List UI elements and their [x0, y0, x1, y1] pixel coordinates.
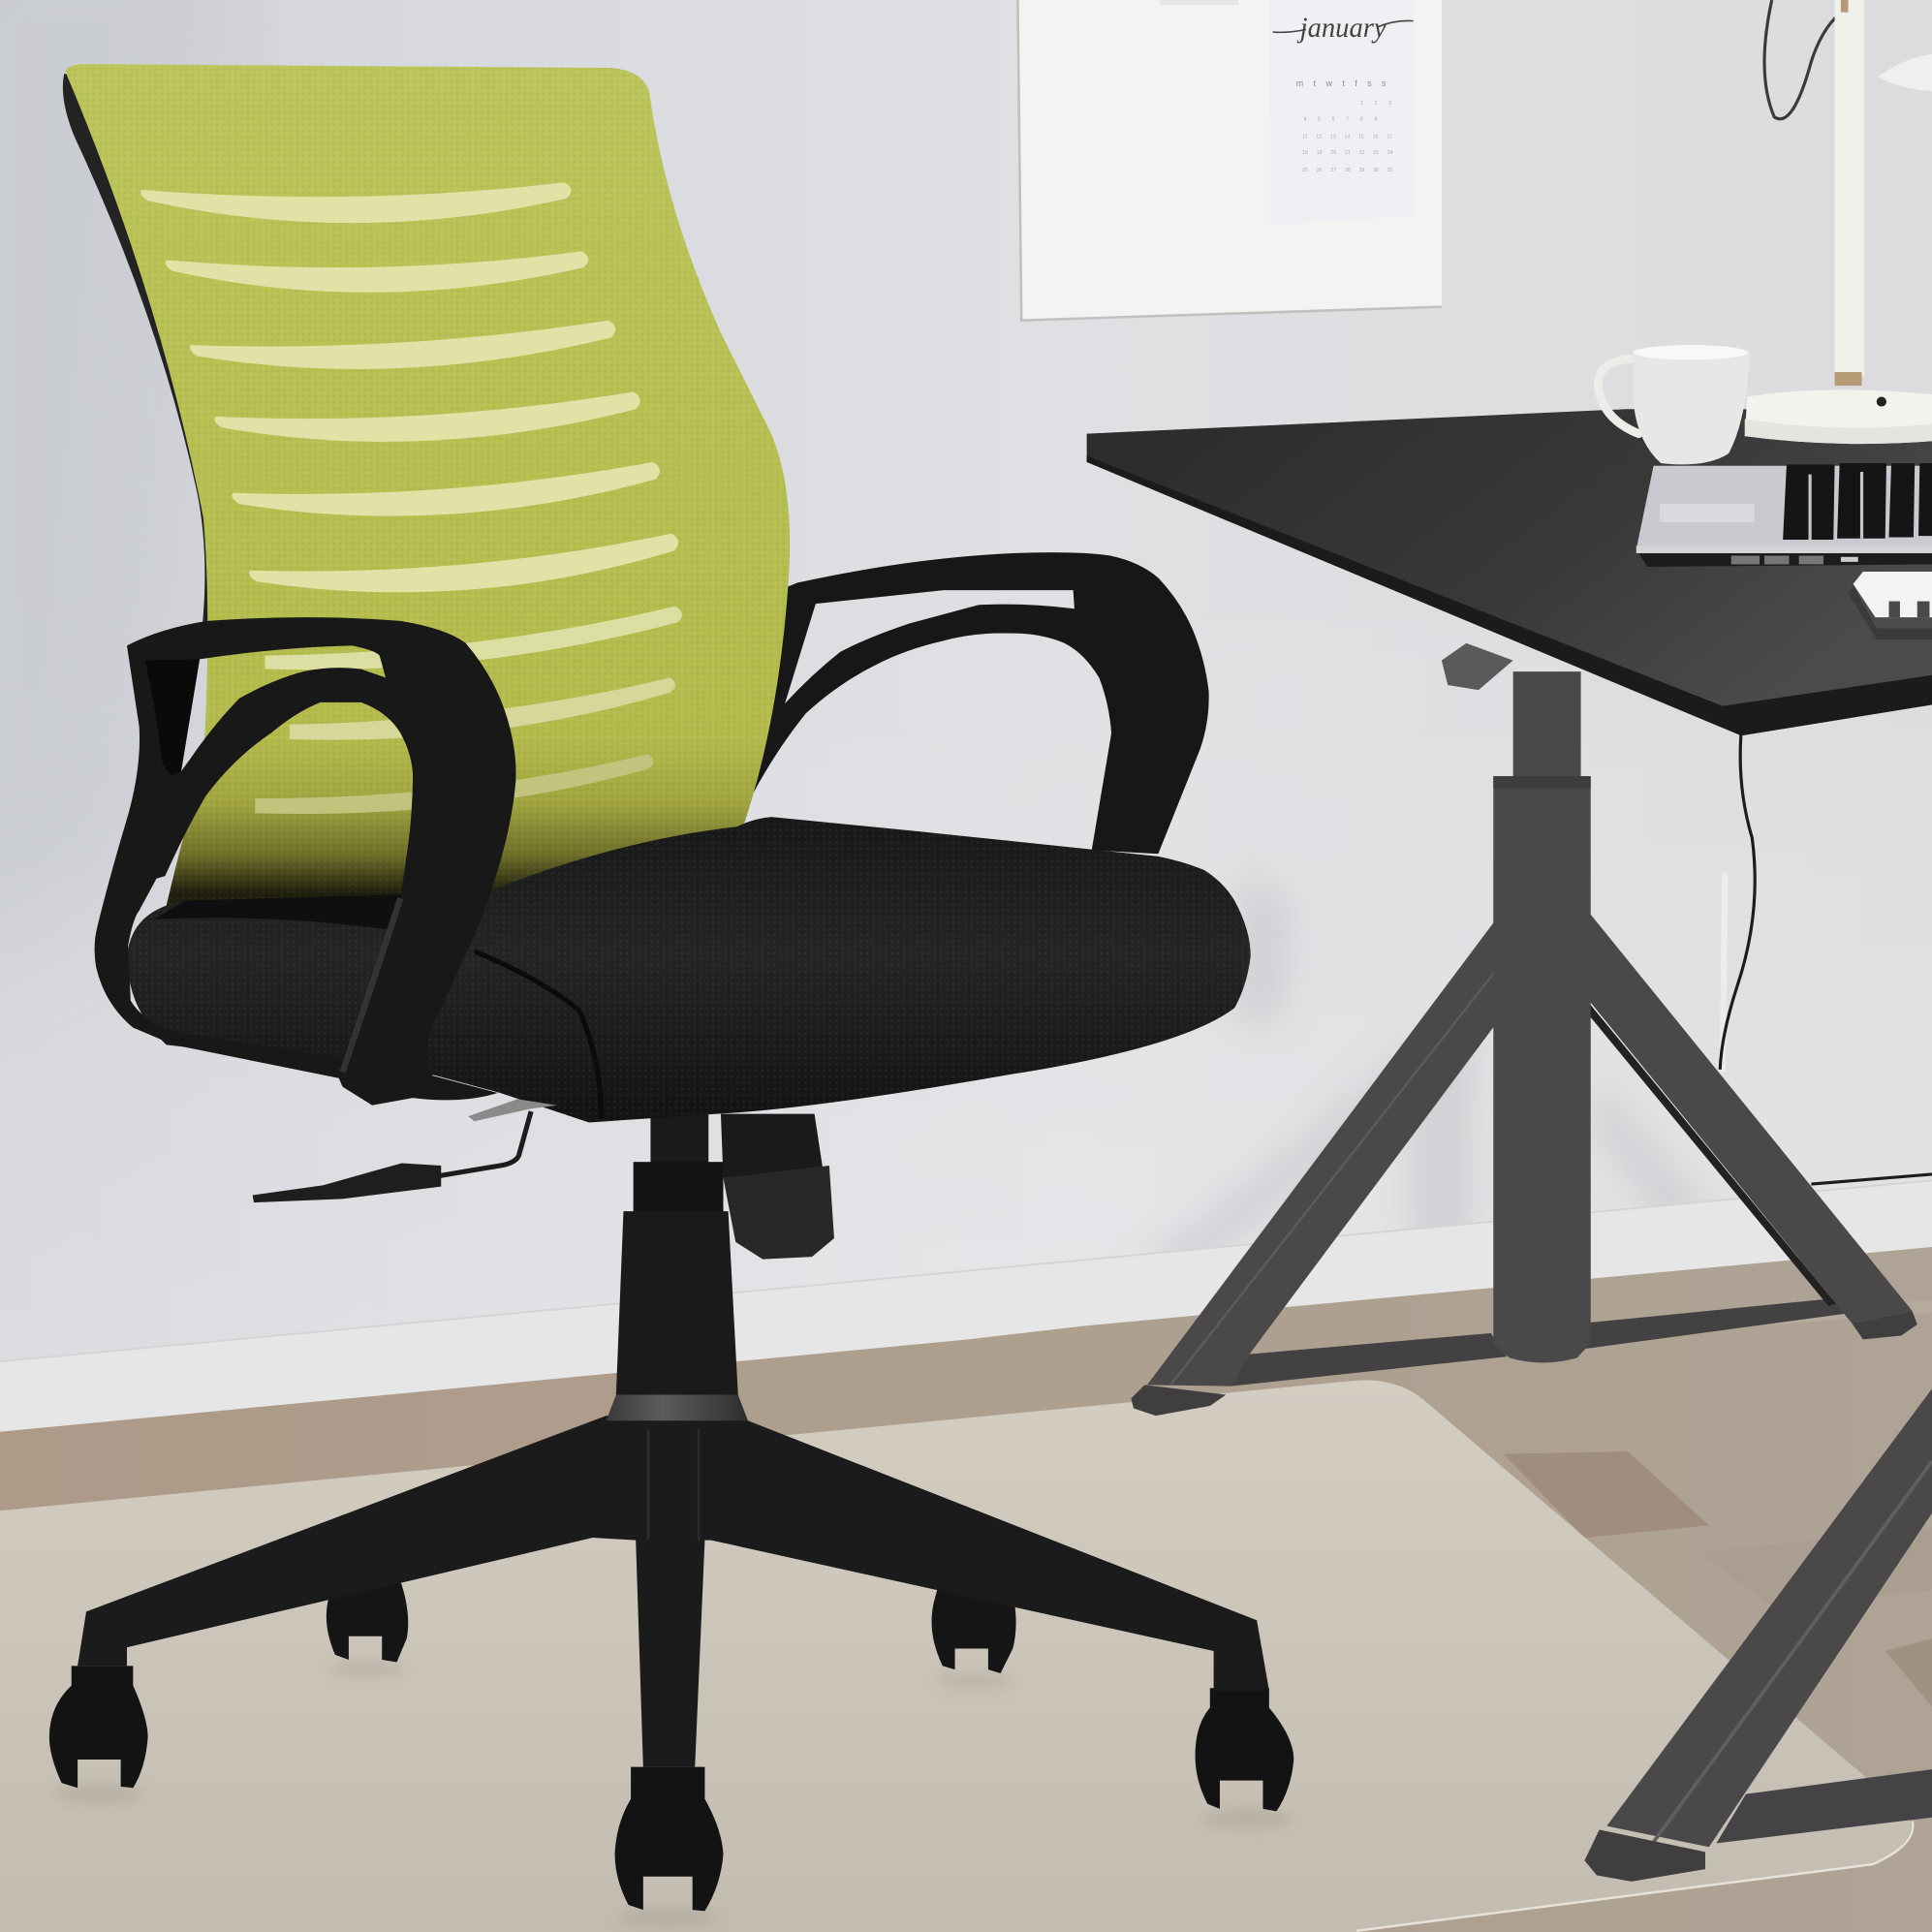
calendar dates: 4 5 6 7 8 9: [1303, 117, 1378, 123]
mug: [1598, 345, 1750, 464]
right diagonal brace: [1587, 913, 1913, 1324]
desk leg: [1131, 643, 1917, 1416]
chair casters and base: [49, 1416, 1293, 1926]
laptop keyboard: [1783, 463, 1932, 540]
back ventilation slats: [140, 182, 682, 814]
armrest highlight: [343, 898, 400, 1072]
wall shadows: [1139, 862, 1725, 1282]
desk leg column: [1493, 671, 1591, 1362]
floor mat: [0, 1380, 1913, 1932]
seat front band: [154, 892, 486, 943]
caster shadows: [51, 1663, 1293, 1926]
right armrest: [721, 552, 1209, 854]
calendar flourish: [1273, 20, 1414, 32]
left diagonal brace: [1147, 913, 1507, 1387]
laptop: [1636, 463, 1932, 567]
laptop label: [1660, 504, 1755, 522]
armrest window shade: [145, 659, 200, 776]
calendar weekdays: mtwtfss: [1296, 78, 1396, 88]
seat cushion: [128, 817, 1251, 1123]
calendar dates: 1 2 3: [1360, 101, 1391, 107]
tilt knob: [721, 1114, 834, 1260]
laptop deck: [1636, 466, 1932, 549]
calendar month: january: [1296, 13, 1387, 44]
wall: [0, 0, 1932, 1479]
front right caster: [1196, 1688, 1293, 1811]
notebook: [1849, 572, 1932, 639]
calendar dates: 11 12 13 14 15 16 17: [1302, 134, 1392, 140]
front left caster: [49, 1666, 148, 1788]
baseboard: [0, 1180, 1932, 1466]
lamp shade: [1878, 54, 1932, 91]
seat piping: [475, 951, 602, 1119]
second leg diagonal: [1606, 1388, 1932, 1847]
lower crossbars: [1231, 1333, 1507, 1387]
wood floor: [0, 1247, 1932, 1932]
front centre caster: [615, 1767, 723, 1911]
calendar dates: 18 19 20 21 22 23 24: [1302, 150, 1393, 156]
height bracket: [1442, 643, 1513, 690]
second leg crossbar: [1716, 1769, 1932, 1843]
rear caster right: [932, 1583, 1016, 1673]
torn fabric: [468, 1099, 557, 1121]
lamp brass ring: [1835, 372, 1862, 386]
second leg foot: [1584, 1829, 1705, 1882]
lamp stem: [1835, 0, 1864, 376]
lift upper: [634, 1162, 723, 1221]
chair back edge: [63, 74, 222, 629]
gas lift: [607, 1109, 748, 1420]
lift neck: [650, 1109, 708, 1166]
height lever: [253, 1111, 531, 1202]
desk lamp: [1745, 0, 1932, 444]
five-star base: [78, 1416, 1269, 1767]
lamp base: [1745, 390, 1932, 444]
second desk leg: [1584, 1388, 1932, 1882]
wall poster: [1017, 0, 1442, 321]
desk top: [1087, 409, 1932, 735]
calendar dates: 25 26 27 28 29 30 31: [1302, 168, 1393, 173]
calendar card: [1269, 0, 1414, 226]
desk feet: [1131, 1385, 1226, 1416]
power cable: [1720, 734, 1932, 1184]
chair back mesh: [65, 64, 790, 906]
rear caster left: [327, 1581, 408, 1663]
lamp cable: [1764, 0, 1838, 119]
lift collar: [607, 1395, 748, 1420]
laptop ports: [1731, 556, 1858, 564]
left armrest: [95, 617, 516, 1106]
calendar dates: [1302, 101, 1393, 173]
lift column: [616, 1211, 738, 1395]
